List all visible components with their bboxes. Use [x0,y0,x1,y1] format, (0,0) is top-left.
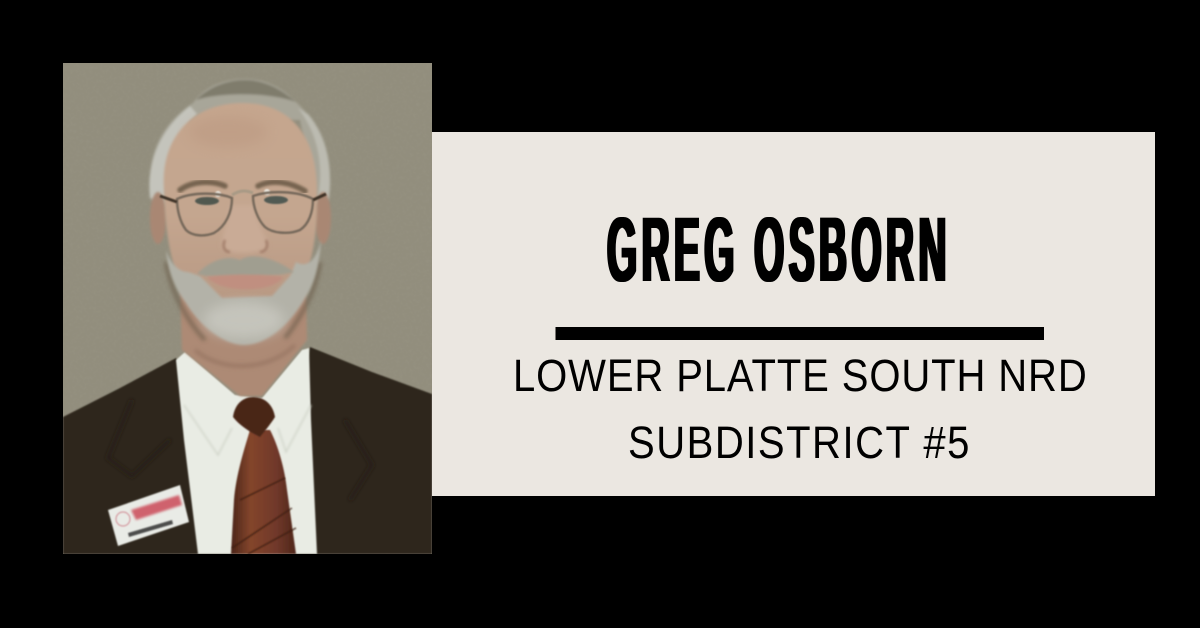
panel: name card [432,132,1155,496]
necktie [231,397,296,554]
eyeglasses [160,191,326,235]
jacket lapels [112,457,137,473]
white shirt [176,348,317,554]
eyebrows [180,182,305,191]
portrait photo [63,63,432,554]
ears [150,192,331,244]
name badge [108,485,189,546]
mouth [207,275,283,289]
eyes [195,189,288,205]
nose shadow [224,240,267,252]
forehead texture [188,116,268,148]
divider bar [556,327,1044,340]
hair [149,79,330,205]
heading: name: GREG OSBORN [607,198,946,301]
text: subdistrict: SUBDISTRICT #5 [628,418,969,469]
nose [224,220,264,252]
photo backdrop [63,63,432,554]
neck creases [195,345,295,366]
face [162,102,318,298]
neck [180,290,307,396]
moustache [197,256,294,276]
text: district: LOWER PLATTE SOUTH NRD [513,351,1087,402]
jaw shadow [166,262,320,340]
suit jacket [63,347,432,554]
beard [166,240,321,345]
shirt collar shading [184,405,311,455]
beard highlight [204,302,284,338]
